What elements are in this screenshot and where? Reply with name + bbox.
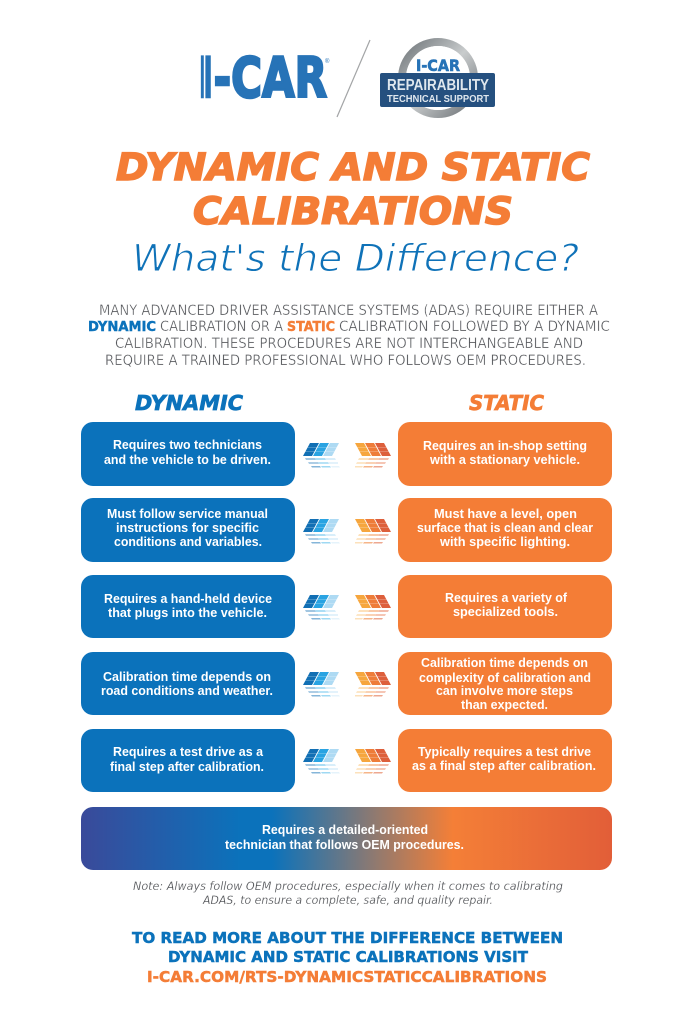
- logo divider slash: [337, 40, 370, 117]
- row 3 dynamic card: Requires a hand-held device: [104, 592, 272, 606]
- title: DYNAMIC AND STATIC: [116, 146, 590, 189]
- row 5 left chevrons: [303, 749, 341, 774]
- logo: Repairability Technical Support badge: [380, 42, 495, 114]
- row 2 dynamic card: instructions for specific: [116, 521, 259, 535]
- row 1 static card: [398, 422, 612, 486]
- column heading: dynamic: DYNAMIC: [135, 391, 243, 415]
- title: [116, 146, 590, 233]
- intro paragraph: MANY ADVANCED DRIVER ASSISTANCE SYSTEMS (ADAS) REQUIRE EITHER A: [99, 303, 598, 319]
- row 5 static card: [398, 729, 612, 792]
- note: [133, 879, 563, 907]
- row 5 dynamic card: Requires a test drive as a: [113, 745, 264, 759]
- note: ADAS, to ensure a complete, safe, and quality repair.: [202, 893, 493, 907]
- row 2 static card: Must have a level, open: [434, 507, 577, 521]
- shared gradient card: Requires a detailed-oriented: [262, 823, 428, 837]
- row 1 left chevrons: [303, 443, 341, 468]
- row 4 right chevrons: [353, 672, 393, 696]
- row 3 static card: [398, 575, 612, 638]
- row 3 dynamic card: [81, 575, 295, 638]
- row 2 dynamic card: Must follow service manual: [107, 507, 268, 521]
- shared gradient card: technician that follows OEM procedures.: [225, 838, 464, 852]
- row 3 dynamic card: that plugs into the vehicle.: [108, 606, 267, 620]
- row 2 static card: with specific lighting.: [439, 535, 570, 549]
- logo: I-CAR: ®: [325, 58, 330, 65]
- intro paragraph: [88, 303, 610, 369]
- column heading: static: STATIC: [469, 391, 544, 415]
- row 3 static card: Requires a variety of: [445, 591, 568, 605]
- row 5 dynamic card: [81, 729, 295, 792]
- row 5 static card: Typically requires a test drive: [418, 745, 591, 759]
- row 4 dynamic card: [81, 652, 295, 715]
- row 1 static card: Requires an in-shop setting: [423, 439, 587, 453]
- call to action: I-CAR.COM/RTS-DYNAMICSTATICCALIBRATIONS: [147, 968, 547, 986]
- call to action: [132, 929, 563, 986]
- intro paragraph: DYNAMIC: [88, 320, 156, 335]
- row 3 right chevrons: [353, 595, 393, 620]
- row 4 static card: than expected.: [461, 698, 548, 712]
- row 2 right chevrons: [353, 519, 393, 544]
- row 1 dynamic card: Requires two technicians: [113, 438, 262, 452]
- logo: Repairability Technical Support badge: I-CAR: [416, 56, 460, 75]
- logo: Repairability Technical Support badge: REPAIRABILITY: [387, 77, 490, 94]
- row 1 static card: with a stationary vehicle.: [429, 453, 580, 467]
- intro paragraph: REQUIRE A TRAINED PROFESSIONAL WHO FOLLOWS OEM PROCEDURES.: [105, 353, 586, 369]
- row 4 static card: complexity of calibration and: [419, 671, 591, 685]
- row 4 dynamic card: Calibration time depends on: [103, 670, 271, 684]
- row 5 dynamic card: final step after calibration.: [110, 760, 264, 774]
- row 2 dynamic card: [81, 498, 295, 562]
- row 3 static card: specialized tools.: [453, 605, 558, 619]
- row 3 left chevrons: [303, 595, 341, 620]
- title: CALIBRATIONS: [193, 190, 513, 233]
- intro paragraph: STATIC: [287, 320, 335, 335]
- row 1 dynamic card: and the vehicle to be driven.: [104, 453, 271, 467]
- row 4 static card: can involve more steps: [436, 684, 573, 698]
- call to action: TO READ MORE ABOUT THE DIFFERENCE BETWEEN: [132, 929, 563, 947]
- intro paragraph: CALIBRATION. THESE PROCEDURES ARE NOT INTERCHANGEABLE AND: [115, 336, 583, 352]
- intro paragraph: CALIBRATION FOLLOWED BY A DYNAMIC: [339, 319, 610, 335]
- logo: Repairability Technical Support badge: TECHNICAL SUPPORT: [387, 93, 490, 105]
- call to action: DYNAMIC AND STATIC CALIBRATIONS VISIT: [168, 948, 528, 966]
- row 5 right chevrons: [353, 749, 393, 774]
- row 4 dynamic card: road conditions and weather.: [101, 684, 273, 698]
- row 2 static card: surface that is clean and clear: [417, 521, 593, 535]
- logo: I-CAR: I-CAR: [198, 46, 327, 110]
- row 4 static card: Calibration time depends on: [421, 656, 588, 670]
- intro paragraph: CALIBRATION OR A: [160, 319, 283, 335]
- shared gradient card: [81, 807, 612, 870]
- row 5 static card: as a final step after calibration.: [412, 759, 596, 773]
- note: Note: Always follow OEM procedures, especially when it comes to calibrating: [133, 879, 563, 893]
- row 2 static card: [398, 498, 612, 562]
- row 1 dynamic card: [81, 422, 295, 486]
- subtitle: What's the Difference?: [132, 237, 579, 280]
- row 1 right chevrons: [353, 443, 393, 468]
- row 2 left chevrons: [303, 519, 341, 544]
- row 4 static card: [398, 652, 612, 715]
- row 4 left chevrons: [303, 672, 341, 696]
- row 2 dynamic card: conditions and variables.: [114, 535, 262, 549]
